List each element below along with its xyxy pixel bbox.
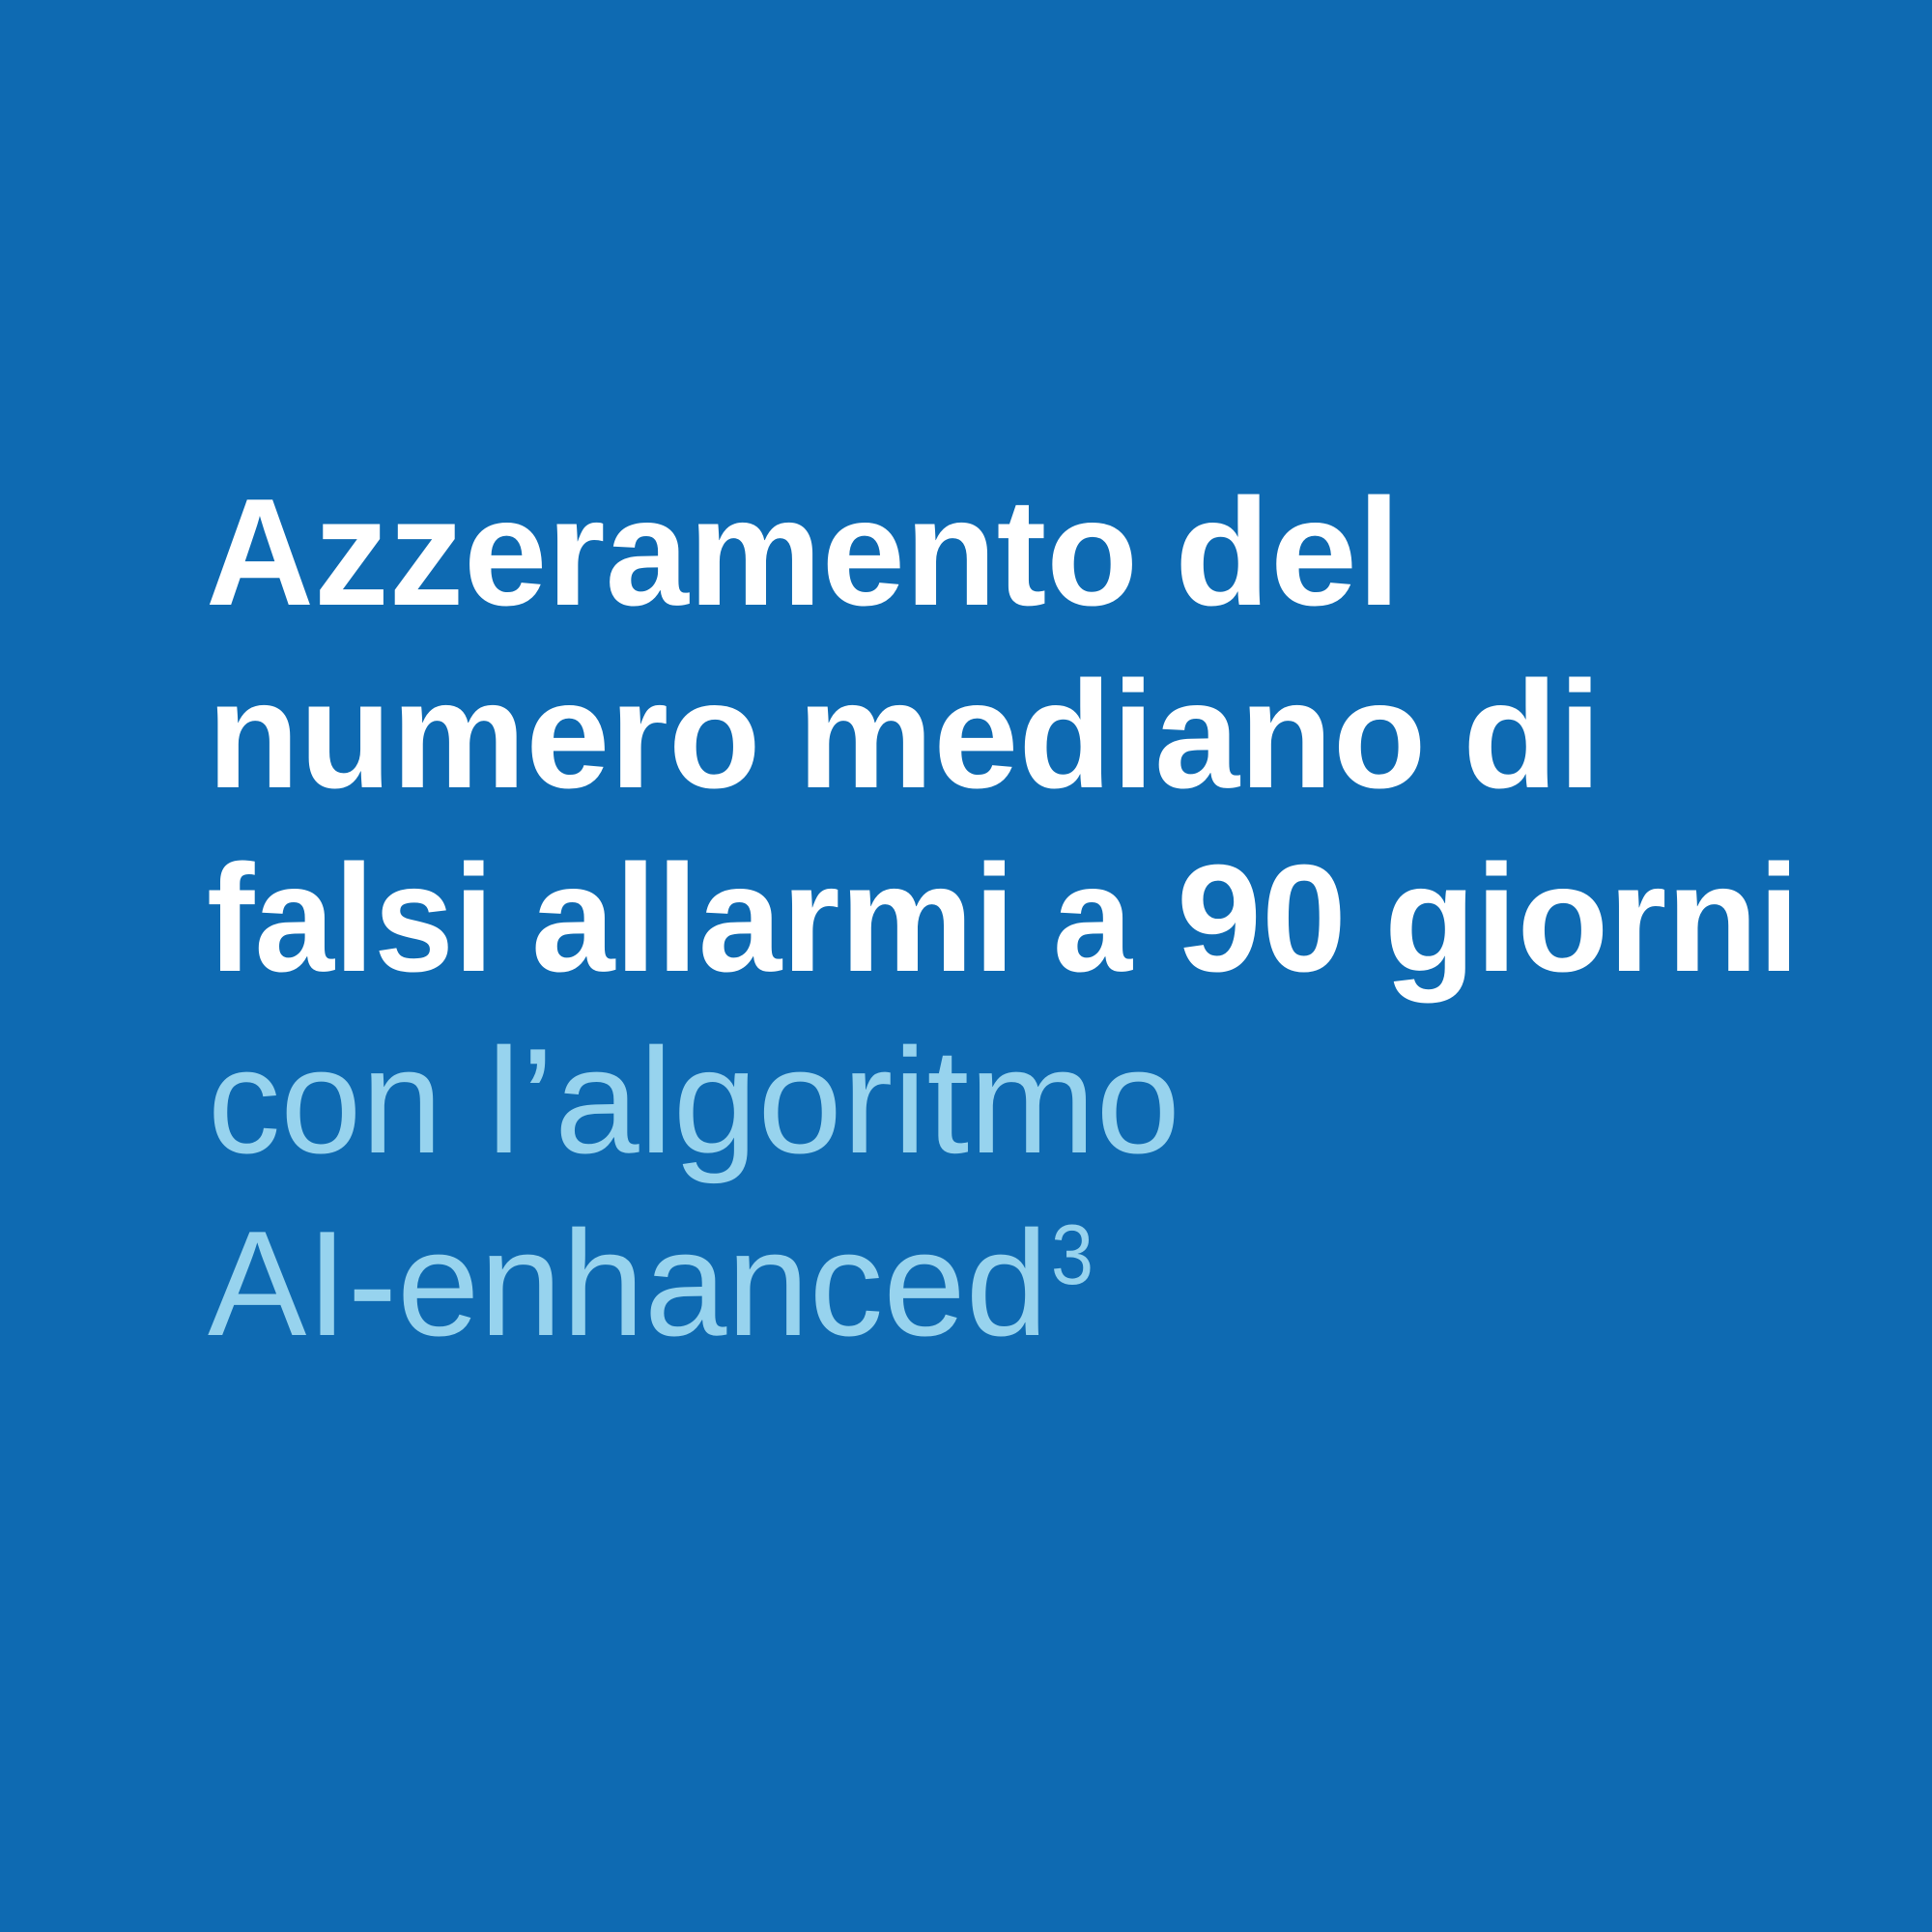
heading: bold white headline: di xyxy=(1463,650,1602,820)
heading: bold white headline: a xyxy=(1053,834,1133,1004)
subheading: light blue text: l’algoritmo xyxy=(487,1017,1180,1184)
heading: bold white headline: allarmi xyxy=(531,834,1015,1004)
heading: bold white headline xyxy=(206,468,1800,1004)
subheading: light blue text: 3 xyxy=(1051,1207,1094,1302)
heading: bold white headline: Azzeramento xyxy=(206,468,1138,638)
subheading: light blue text xyxy=(208,1017,1180,1367)
heading: bold white headline: numero xyxy=(207,650,761,820)
heading: bold white headline: mediano xyxy=(798,650,1426,820)
subheading: light blue text: con xyxy=(208,1017,442,1184)
heading: bold white headline: giorni xyxy=(1384,834,1800,1004)
heading: bold white headline: del xyxy=(1175,468,1401,638)
subheading: light blue text: AI-enhanced xyxy=(208,1200,1048,1367)
heading: bold white headline: 90 xyxy=(1177,834,1347,1004)
heading: bold white headline: falsi xyxy=(207,834,494,1004)
